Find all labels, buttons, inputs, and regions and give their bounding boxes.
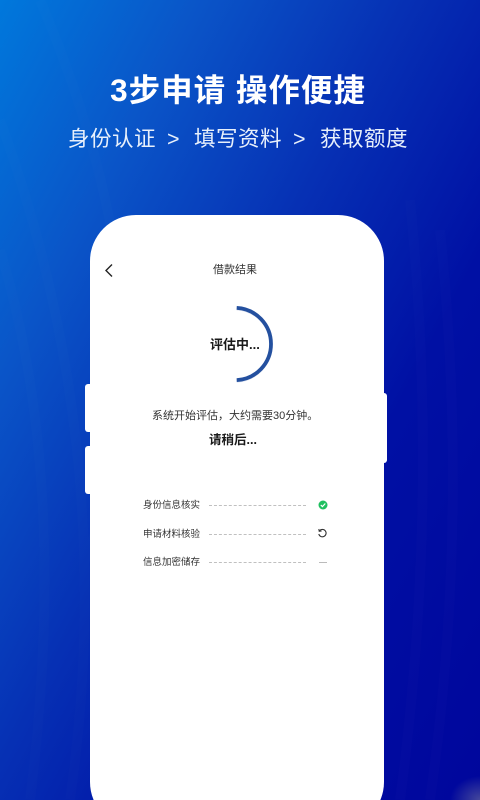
subtitle: 获取额度	[320, 127, 408, 151]
step 2 dashes	[209, 534, 306, 535]
icon: pending dash	[319, 562, 327, 563]
wait message: 请稍后...	[209, 433, 257, 447]
subtitle: 身份认证	[68, 127, 156, 151]
phone side button: lower left	[85, 446, 95, 494]
title: 3步申请 操作便捷	[110, 72, 366, 108]
step 1 label: 身份信息核实	[143, 500, 200, 511]
subtitle	[68, 127, 408, 151]
icon: in-progress refresh	[318, 528, 327, 538]
subtitle: >	[167, 127, 180, 151]
step 3 dashes	[209, 562, 306, 563]
step 3 label: 信息加密储存	[143, 557, 200, 568]
icon: green check	[318, 500, 328, 510]
step 2 label: 申请材料核验	[143, 529, 200, 540]
screen heading: 借款结果	[213, 264, 257, 276]
phone side button: upper left	[85, 384, 95, 432]
phone side button: right	[380, 393, 387, 463]
icon: back arrow	[105, 264, 112, 277]
status message: 系统开始评估，大约需要30分钟。	[152, 410, 318, 422]
phone body	[90, 215, 384, 800]
step 1 dashes	[209, 505, 306, 506]
subtitle: >	[293, 127, 306, 151]
phone mockup	[85, 215, 387, 800]
progress arc	[236, 306, 273, 382]
subtitle: 填写资料	[194, 127, 282, 151]
progress label: 评估中...	[210, 337, 260, 352]
